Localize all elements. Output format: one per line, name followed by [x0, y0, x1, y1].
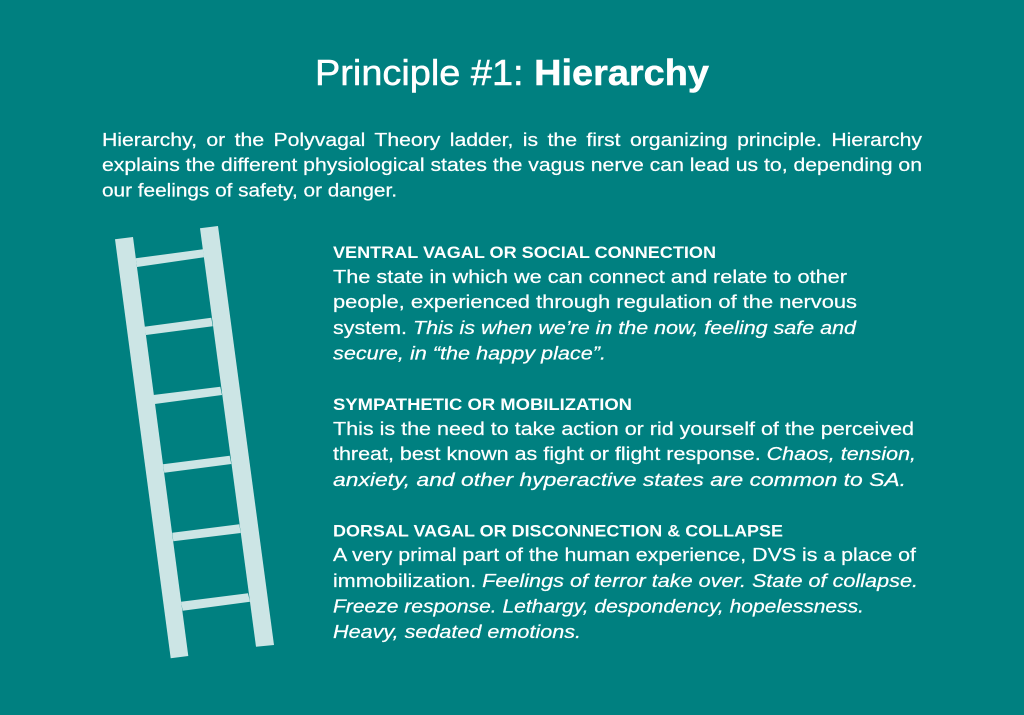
section: dorsal vagal — [333, 522, 918, 642]
section: ventral vagal — [333, 244, 857, 364]
title: Principle #1: Hierarchy — [315, 52, 709, 93]
intro paragraph: our feelings of safety, or danger. — [102, 180, 397, 200]
section: ventral vagal: secure, in “the happy place”. — [333, 344, 606, 364]
heading: ventral vagal: VENTRAL VAGAL OR SOCIAL CONNECTION — [333, 244, 716, 262]
icon: ladder — [115, 226, 274, 658]
intro paragraph: Hierarchy, or the Polyvagal Theory ladder, is the first organizing principle. Hierarchy — [102, 130, 922, 150]
section: sympathetic: This is the need to take action or rid yourself of the perceived — [333, 419, 914, 439]
heading: dorsal vagal: DORSAL VAGAL OR DISCONNECTION & COLLAPSE — [333, 522, 783, 540]
section: sympathetic: anxiety, and other hyperactive states are common to SA. — [333, 470, 906, 490]
section: ventral vagal: The state in which we can connect and relate to other — [333, 267, 847, 287]
section: sympathetic — [333, 396, 916, 490]
section: ventral vagal: system. This is when we’re in the now, feeling safe and — [333, 318, 857, 338]
section: dorsal vagal: Freeze response. Lethargy, despondency, hopelessness. — [333, 596, 864, 616]
intro paragraph: explains the different physiological states the vagus nerve can lead us to, depending on — [102, 155, 922, 175]
section: sympathetic: threat, best known as fight or flight response. Chaos, tension, — [333, 444, 916, 464]
heading: sympathetic: SYMPATHETIC OR MOBILIZATION — [333, 396, 632, 414]
section: ventral vagal: people, experienced through regulation of the nervous — [333, 292, 857, 312]
intro paragraph — [102, 130, 922, 200]
section: dorsal vagal: A very primal part of the human experience, DVS is a place of — [333, 545, 917, 565]
section: dorsal vagal: Heavy, sedated emotions. — [333, 622, 581, 642]
section: dorsal vagal: immobilization. Feelings of terror take over. State of collapse. — [333, 571, 918, 591]
